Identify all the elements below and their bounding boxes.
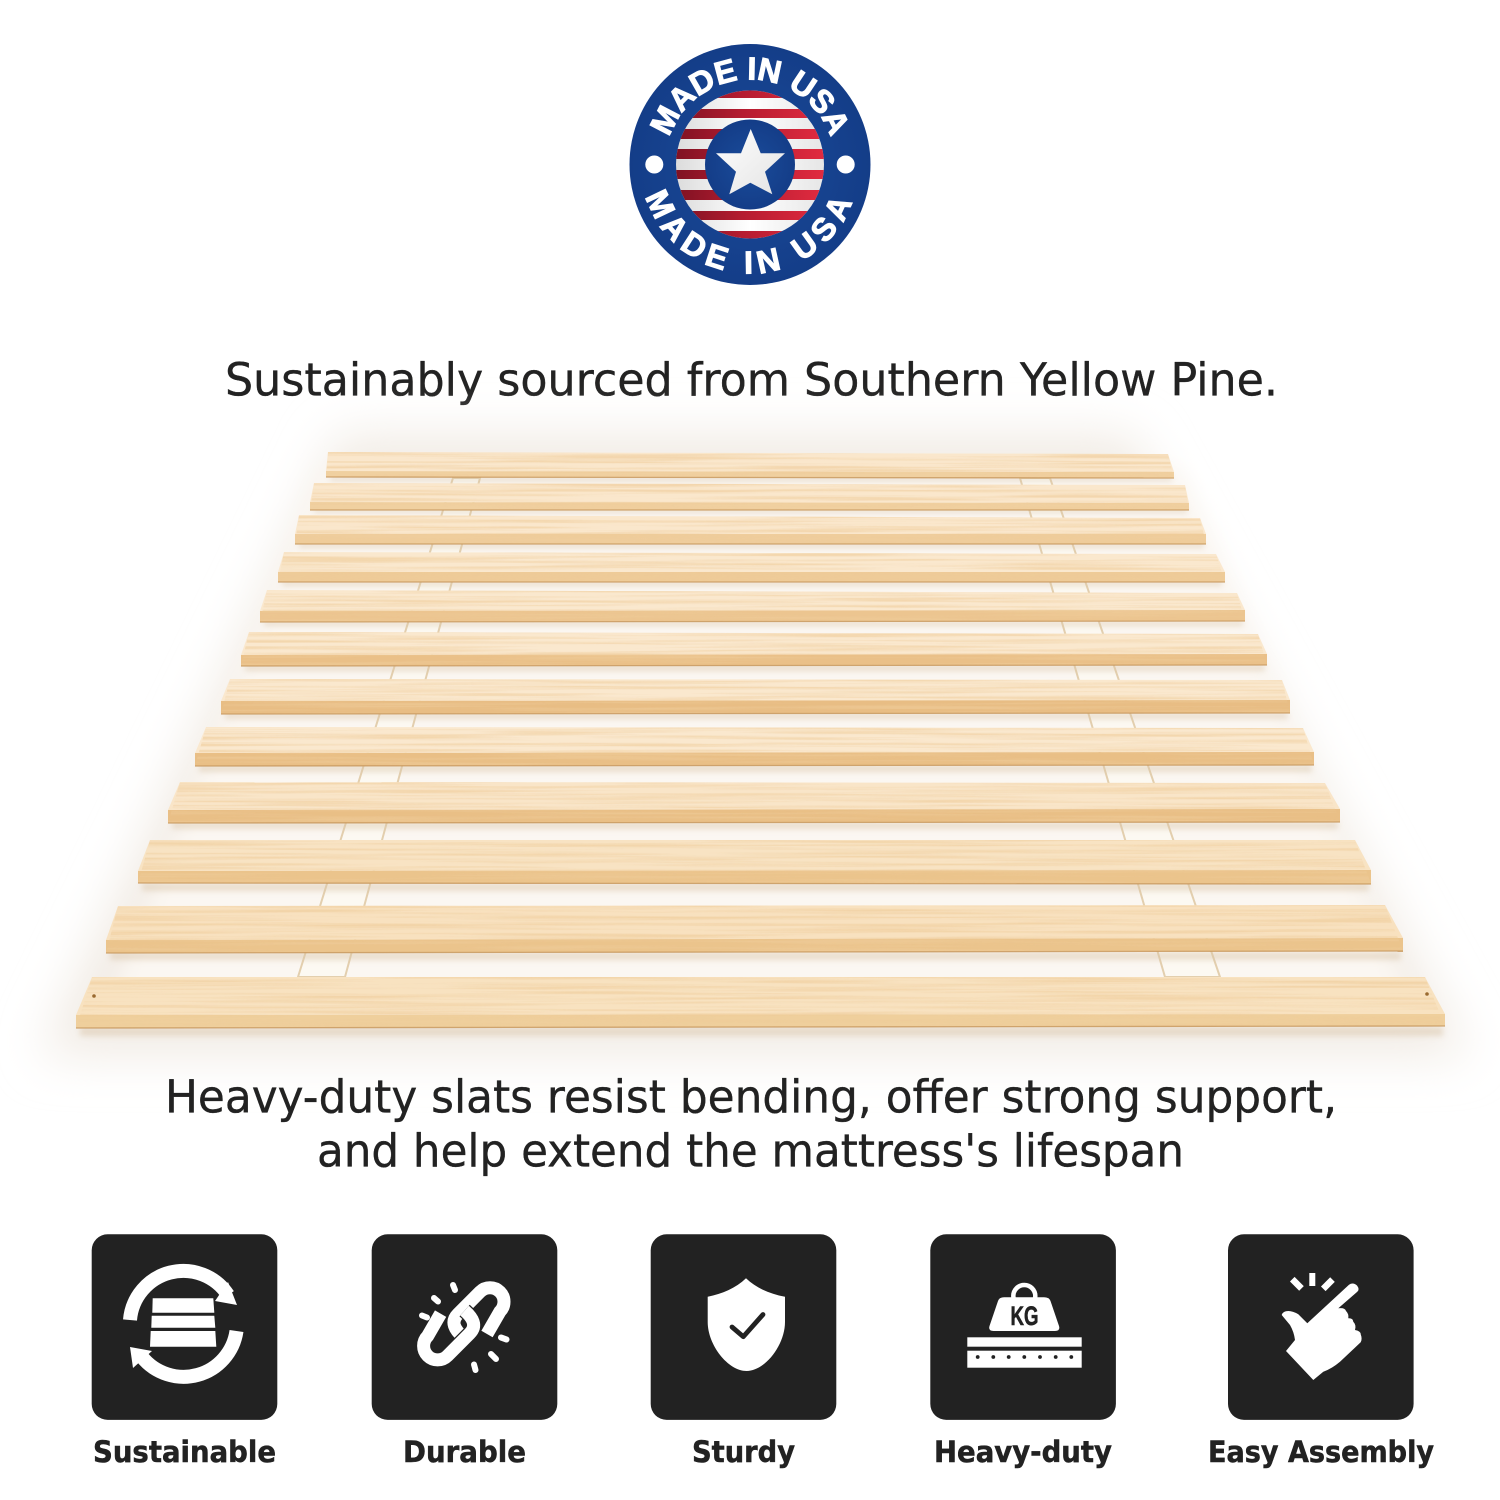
slats: [76, 452, 1445, 1028]
feature: durable: [372, 1234, 557, 1469]
body text: heavy-duty slats: [165, 1070, 1337, 1178]
icon: chain link: [422, 1285, 506, 1370]
icon: kg weight on mattress: [967, 1285, 1082, 1368]
body text: heavy-duty slats: Heavy-duty slats resist bending, offer strong support,: [165, 1070, 1337, 1124]
body text: heavy-duty slats: and help extend the mattress's lifespan: [317, 1124, 1184, 1178]
badge: made in usa: [630, 44, 870, 285]
slat lower edges: [76, 477, 1445, 1028]
icon: shield with check: [708, 1278, 785, 1371]
label: sturdy: Sturdy: [692, 1435, 795, 1469]
badge: made in usa: MADE IN USA: [644, 188, 853, 274]
fabric straps: [298, 478, 1220, 977]
feature: sturdy: [651, 1234, 836, 1469]
label: durable: Durable: [403, 1435, 526, 1469]
slat shadows: [80, 477, 1443, 1036]
heading: sustainably sourced: Sustainably sourced from Southern Yellow Pine.: [225, 354, 1278, 406]
feature: sustainable: [92, 1234, 277, 1469]
product photo: wooden slat roll: [40, 435, 1470, 1055]
feature: easy assembly: [1208, 1234, 1434, 1469]
badge: made in usa: MADE IN USA: [649, 57, 848, 138]
label: sustainable: Sustainable: [93, 1435, 276, 1469]
wood grain: [70, 445, 1450, 1035]
label: heavy-duty: Heavy-duty: [934, 1435, 1112, 1469]
icon: recycling arrows around planks: [130, 1271, 237, 1377]
icon: pointing hand: [1282, 1273, 1362, 1380]
feature: heavy-duty: [930, 1234, 1116, 1469]
label: easy assembly: Easy Assembly: [1208, 1435, 1434, 1469]
icon: kg weight on mattress: KG: [1010, 1301, 1038, 1331]
